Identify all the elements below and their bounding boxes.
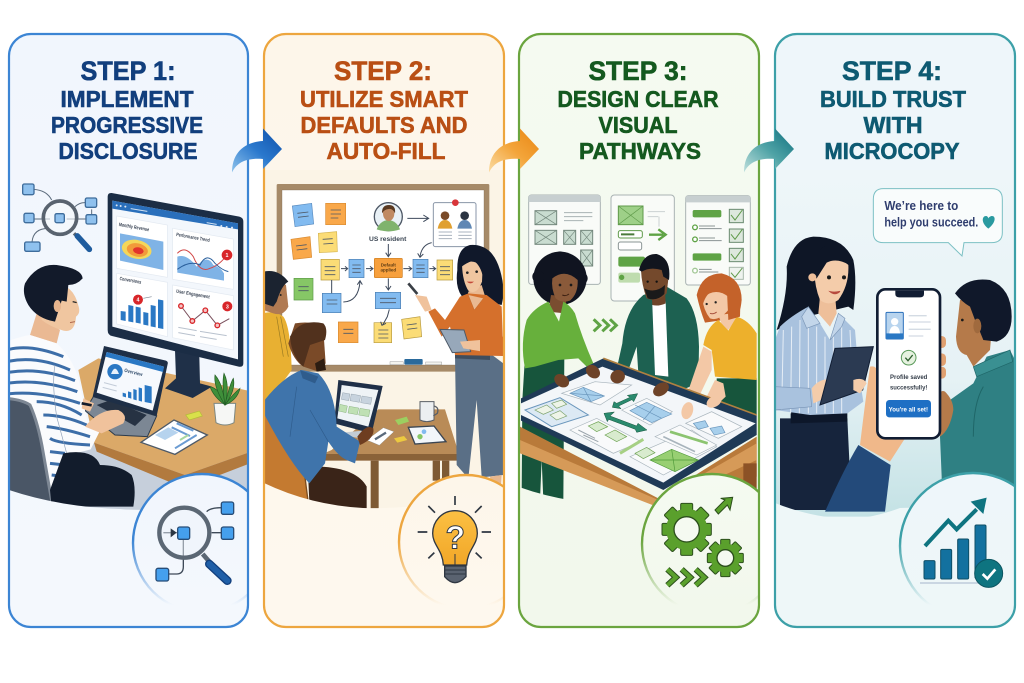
illustration: colleagues reviewing a phone	[770, 170, 1024, 517]
phone: successfully!	[890, 385, 927, 392]
table	[320, 409, 459, 511]
panel: step 1	[7, 34, 271, 627]
avatar: US resident: US resident	[369, 236, 407, 243]
heading: step 2: STEP 2:	[334, 56, 432, 86]
chevrons	[594, 319, 616, 331]
sticky notes	[291, 203, 453, 343]
table with wireframe layouts	[520, 358, 757, 507]
person presenting	[408, 245, 504, 490]
flow arrows	[332, 215, 436, 325]
heading: step 2: DEFAULTS AND	[300, 112, 468, 138]
heading: step 1: IMPLEMENT	[60, 86, 194, 112]
arrow: step 3 to step 4	[744, 128, 794, 172]
plant	[210, 373, 240, 425]
illustration: team at a whiteboard	[260, 170, 507, 517]
chart card: user engagement: 3	[226, 304, 229, 310]
icon: heart	[983, 216, 995, 229]
heading: step 3: STEP 3:	[588, 56, 688, 86]
flow arrows on table	[604, 394, 647, 432]
chart card: conversions: Conversions	[119, 276, 142, 286]
woman in green	[522, 251, 593, 502]
chart card: conversions	[117, 273, 167, 337]
heading: step 2: AUTO-FILL	[326, 138, 446, 164]
chart card: user engagement: User Engagement	[176, 289, 210, 301]
heading: step 3: VISUAL	[598, 112, 678, 138]
laptop	[333, 380, 383, 440]
table layouts	[525, 382, 742, 475]
heading: step 1: PROGRESSIVE	[51, 112, 203, 138]
icon: growth chart with check	[920, 498, 1003, 587]
person in blue shirt	[265, 322, 373, 517]
heading: step 4: WITH	[864, 112, 922, 138]
avatar: US resident	[369, 203, 407, 243]
monitor stand	[165, 350, 212, 398]
man in teal	[940, 279, 1015, 517]
default applied box: applied	[380, 268, 396, 273]
chart card: user engagement	[173, 285, 233, 350]
chart card: conversions: 4	[137, 298, 140, 304]
illustration: team around a wireframe table	[520, 195, 757, 507]
panel: step 2	[262, 32, 506, 628]
icon: flow diagram with magnifier	[23, 184, 97, 251]
pants	[50, 452, 135, 507]
arrow: step 2 to step 3	[489, 128, 539, 172]
badge: magnifier	[132, 472, 247, 602]
panel: step 4	[770, 34, 1024, 627]
heading: step 1: DISCLOSURE	[58, 138, 198, 164]
whiteboard	[277, 184, 489, 372]
laptop: Overview	[124, 368, 143, 378]
woman with tablet	[775, 237, 873, 510]
badge: lightbulb	[398, 474, 503, 602]
man in teal shirt	[615, 254, 699, 390]
chart card: performance trend: Performance Trend	[176, 232, 210, 244]
sticky note	[186, 411, 202, 420]
default applied box: Default	[381, 263, 396, 268]
phone: Profile saved	[890, 374, 927, 381]
heading: step 3: DESIGN CLEAR	[558, 86, 719, 112]
chair	[10, 400, 52, 502]
chart card: monthly revenue: Monthly Revenue	[118, 222, 150, 233]
heading: step 1: STEP 1:	[80, 56, 176, 86]
badge: gears	[642, 474, 782, 614]
monitor	[108, 193, 243, 367]
default applied box	[374, 258, 402, 278]
heading: step 4: MICROCOPY	[824, 138, 960, 164]
button: you're all set	[886, 400, 931, 417]
chart card: monthly revenue	[117, 216, 167, 277]
phone	[877, 289, 940, 438]
laptop	[85, 346, 168, 437]
desk items	[367, 402, 446, 445]
chart card: performance trend	[173, 228, 233, 289]
speech bubble	[873, 189, 1002, 256]
wireframe 2	[611, 195, 674, 301]
desk	[78, 358, 248, 475]
button: you're all set: You're all set!	[889, 406, 928, 413]
person in yellow hoodie	[265, 271, 292, 400]
panel: step 3	[519, 34, 782, 627]
profile card	[433, 199, 476, 247]
badge: growth chart	[900, 473, 1024, 619]
heading: step 3: PATHWAYS	[579, 138, 701, 164]
heading: step 2	[300, 56, 468, 164]
hands	[552, 362, 672, 399]
heading: step 3	[558, 56, 719, 164]
chart card: performance trend: 1	[226, 253, 229, 259]
illustration: analyst at desk with dashboard	[7, 184, 248, 517]
woman in yellow	[678, 273, 757, 420]
chair	[263, 413, 308, 503]
wireframe 1	[529, 195, 600, 284]
speech bubble: We’re here to	[884, 199, 959, 213]
heading: step 1	[51, 56, 203, 164]
hand and sleeve	[825, 366, 905, 512]
icon: magnifier with nodes	[156, 502, 234, 581]
floor	[78, 442, 247, 510]
arrow: step 1 to step 2	[232, 128, 282, 172]
person	[7, 265, 125, 492]
heading: step 4: BUILD TRUST	[820, 86, 966, 112]
heading: step 2: UTILIZE SMART	[300, 86, 468, 112]
tablet with document	[141, 420, 207, 454]
icon: gears with arrow	[662, 497, 743, 585]
speech bubble: help you succeed.	[884, 216, 978, 230]
wireframe 3	[686, 196, 750, 285]
icon: lightbulb with question mark: ?	[446, 519, 465, 555]
heading: step 4: STEP 4:	[842, 56, 942, 86]
heading: step 4	[820, 56, 966, 164]
fingers	[935, 336, 953, 437]
